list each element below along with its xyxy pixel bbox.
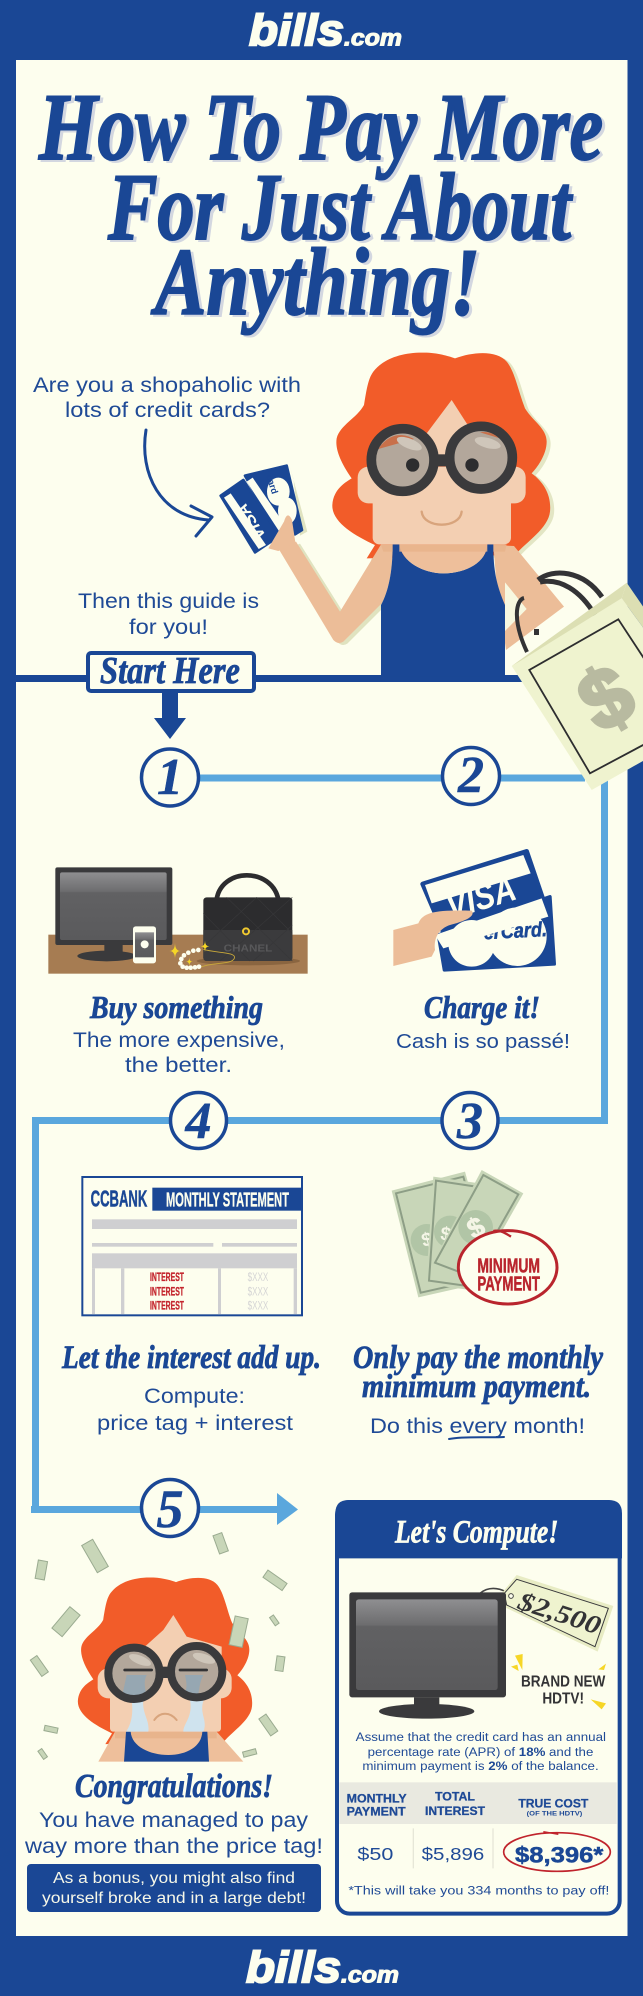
face	[358, 400, 526, 544]
icon: handbag	[203, 875, 292, 961]
price tag: $2,500	[514, 1586, 605, 1640]
neck	[381, 544, 507, 573]
step number 1	[142, 749, 198, 806]
step 2 illustration: hand holding credit cards	[393, 851, 554, 970]
icon: credit cards in hand: card	[264, 473, 280, 496]
step 2 text: Cash is so passé!	[396, 1030, 570, 1053]
step 4 text	[61, 1340, 321, 1435]
step number 2	[442, 747, 500, 804]
title: Anything!	[154, 231, 483, 337]
hdtv	[349, 1592, 506, 1719]
crying neck and dress	[98, 1732, 243, 1762]
crying hair	[78, 1577, 252, 1744]
step 2 text: Charge it!	[424, 989, 540, 1025]
step 1 text: Buy something	[89, 989, 263, 1025]
table values: $8,396*	[515, 1842, 604, 1867]
panel frame and header	[335, 1500, 622, 1914]
step number 2: 2	[457, 747, 484, 804]
table values	[357, 1828, 610, 1871]
table header: PAYMENT	[347, 1805, 406, 1819]
step 4 illustration: monthly statement: INTEREST	[150, 1285, 184, 1299]
step 1 text: the better.	[125, 1054, 232, 1077]
then this guide text: Then this guide is	[78, 590, 259, 613]
hair	[332, 353, 554, 560]
then this guide text: for you!	[129, 616, 208, 639]
header logo: bills	[249, 6, 344, 55]
brand new hdtv label: BRAND NEW	[521, 1674, 606, 1691]
banknote 1	[392, 1172, 495, 1297]
glasses	[371, 426, 512, 491]
table values: $50	[357, 1844, 393, 1864]
icon: credit cards in hand	[221, 466, 307, 552]
step 4 illustration: monthly statement: INTEREST	[150, 1299, 184, 1313]
left arm	[278, 542, 393, 645]
congratulations text	[24, 1768, 323, 1858]
step 4 illustration: monthly statement: $XXX	[248, 1270, 268, 1284]
smile	[422, 512, 462, 525]
arrow: curved to cards	[145, 430, 212, 536]
title: Anything!	[151, 229, 480, 335]
congratulations text: You have managed to pay	[39, 1809, 309, 1832]
step 5 illustration: crying woman with flying money	[30, 1533, 287, 1762]
table header: TRUE COST	[518, 1797, 589, 1811]
step number 3: 3	[456, 1093, 483, 1150]
character: shopaholic woman	[221, 353, 564, 677]
icon: pearls and sparkles	[169, 941, 235, 970]
table header: INTEREST	[425, 1804, 486, 1818]
banknote 3	[432, 1170, 523, 1282]
step 4 illustration: monthly statement: MONTHLY STATEMENT	[166, 1189, 289, 1212]
step 3 illustration: banknotes and minimum payment	[392, 1170, 557, 1304]
step 1 text: The more expensive,	[73, 1029, 285, 1052]
step 4 illustration: monthly statement	[82, 1177, 302, 1315]
step 4 text: Compute:	[144, 1385, 245, 1408]
banknote 3: $	[462, 1210, 490, 1245]
header logo	[249, 6, 402, 55]
flying banknotes	[30, 1533, 287, 1759]
footer logo: bills	[246, 1943, 341, 1992]
congratulations text: Congratulations!	[75, 1768, 273, 1805]
red circled label: PAYMENT	[477, 1274, 540, 1296]
footer logo	[246, 1943, 399, 1992]
banknote 2	[426, 1177, 502, 1293]
step number 5	[142, 1479, 198, 1539]
table header: TOTAL	[435, 1790, 475, 1804]
table values: $5,896	[422, 1844, 484, 1864]
bonus callout: yourself broke and in a large debt!	[42, 1890, 306, 1907]
frown	[154, 1714, 177, 1720]
arrow: start to step 1	[154, 693, 186, 739]
step number 5: 5	[156, 1479, 184, 1539]
red circled label	[458, 1231, 557, 1304]
crying glasses	[108, 1646, 222, 1699]
step 1 text	[73, 989, 285, 1077]
red circled label: MINIMUM	[477, 1256, 540, 1278]
step number 4: 4	[184, 1093, 212, 1150]
brand new hdtv label	[511, 1654, 606, 1709]
step 4 illustration: monthly statement: INTEREST	[150, 1270, 184, 1284]
flow line: light blue connector	[31, 774, 608, 1525]
footer logo: .com	[341, 1962, 399, 1988]
step 4 illustration: monthly statement: $XXX	[248, 1285, 268, 1299]
crying face	[98, 1615, 232, 1732]
icon: phone	[133, 926, 156, 963]
footnote: *This will take you 334 months to pay off!	[348, 1883, 609, 1897]
step number 1: 1	[157, 749, 183, 806]
assumption paragraph: minimum payment is 2% of the balance.	[362, 1759, 599, 1773]
dress	[381, 544, 505, 677]
section divider line	[16, 675, 522, 682]
step 3 text	[353, 1340, 603, 1439]
table header	[339, 1782, 617, 1824]
step 4 text: price tag + interest	[97, 1412, 293, 1435]
step 2 illustration: hand holding credit cards: erCard.	[483, 918, 548, 944]
intro question text: lots of credit cards?	[65, 399, 270, 422]
start here label: Start Here	[100, 650, 240, 692]
bonus callout	[27, 1864, 321, 1912]
panel: let's compute	[335, 1500, 622, 1914]
step 4 illustration: monthly statement: CCBANK	[91, 1186, 147, 1212]
intro question text: Are you a shopaholic with	[33, 374, 301, 397]
right arm	[493, 545, 564, 650]
panel frame and header: Let's Compute!	[394, 1515, 558, 1551]
congratulations text: way more than the price tag!	[24, 1835, 323, 1858]
icon: handbag: CHANEL	[224, 944, 272, 955]
step 2 illustration: hand holding credit cards: VISA	[441, 867, 521, 927]
table header: (OF THE HDTV)	[527, 1811, 582, 1818]
shopping bag with dollar sign	[512, 573, 643, 790]
step 2 text	[396, 989, 570, 1053]
price tag	[480, 1575, 613, 1652]
step 3 text: Do this every month!	[370, 1415, 585, 1438]
step 1 illustration: tv, phone, jewelry, handbag	[48, 867, 308, 974]
banknote 1: $	[419, 1229, 435, 1252]
assumption paragraph: percentage rate (APR) of 18% and the	[368, 1745, 593, 1759]
table header: MONTHLY	[347, 1792, 407, 1806]
brand new hdtv label: HDTV!	[542, 1690, 584, 1707]
step 3 text: Only pay the monthly	[353, 1340, 603, 1376]
bonus callout: As a bonus, you might also find	[53, 1870, 295, 1887]
intro question text	[33, 374, 301, 422]
icon: credit cards in hand: VISA	[232, 500, 269, 544]
title	[38, 74, 606, 337]
then this guide text	[78, 590, 259, 639]
assumption paragraph: Assume that the credit card has an annual	[356, 1730, 606, 1744]
step 3 text: minimum payment.	[362, 1369, 591, 1405]
tears on cheeks	[126, 1699, 205, 1732]
header logo: .com	[344, 24, 402, 50]
step number 4	[170, 1092, 226, 1150]
banknote 2: $	[440, 1224, 452, 1246]
assumption paragraph	[356, 1730, 606, 1773]
step number 3	[442, 1092, 498, 1150]
step 4 text: Let the interest add up.	[61, 1340, 321, 1376]
step 4 illustration: monthly statement: $XXX	[248, 1299, 268, 1313]
